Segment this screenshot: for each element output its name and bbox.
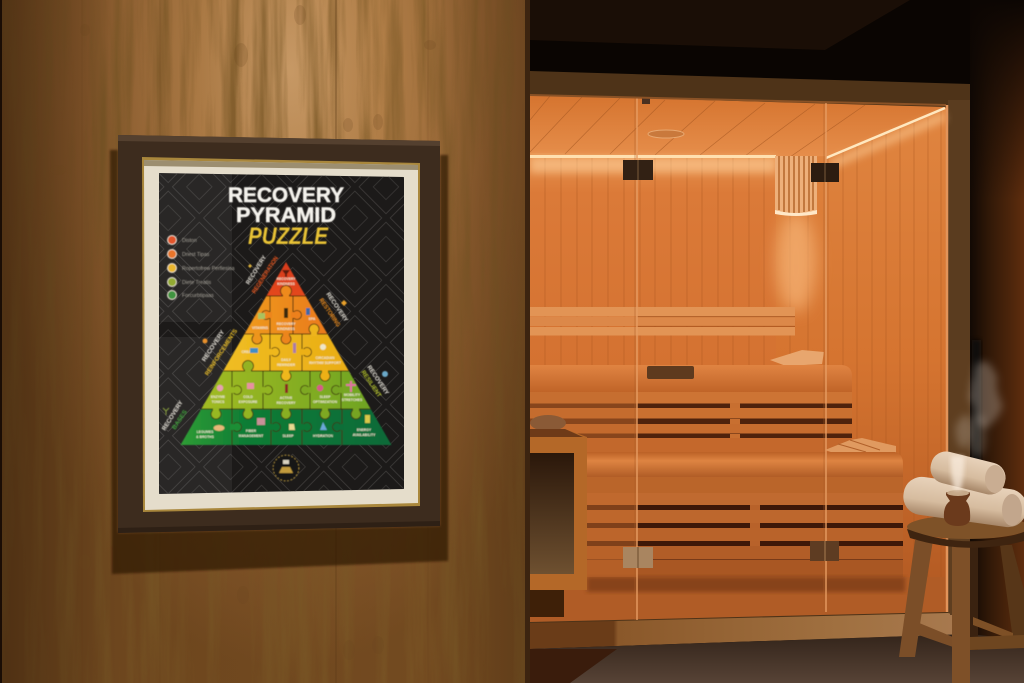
- chart: puzzle pyramid: [180, 262, 392, 445]
- logo badge: [273, 455, 299, 481]
- side wall: [776, 107, 948, 612]
- title: RECOVERY: [228, 184, 344, 207]
- piece labels: RECOVERY: [277, 322, 296, 326]
- piece labels: ENERGY: [357, 428, 372, 432]
- LED glow strip, back wall: [530, 157, 776, 173]
- piece labels: KINDNESS: [277, 327, 295, 331]
- legend: Driest Tipas: [182, 252, 210, 258]
- side label: bottom left: BASES: [171, 409, 189, 431]
- legend: [168, 236, 235, 300]
- wall lamp: [775, 156, 817, 312]
- upper bench: [530, 365, 852, 452]
- tier 5: green: [180, 409, 392, 445]
- legend: Diston: [182, 238, 197, 244]
- piece labels: CREATINE: [241, 350, 259, 354]
- lower towel roll: [901, 475, 1024, 529]
- piece labels: KINDNESS: [277, 282, 295, 286]
- LED glow strip, side wall: [830, 116, 945, 165]
- tier 4: lime: [201, 371, 371, 409]
- side label: middle left: RECOVERY: [201, 328, 227, 363]
- side label: middle right: RESILIENT: [359, 369, 383, 399]
- piece labels: MOBILITY: [344, 393, 361, 397]
- stool: [899, 515, 1024, 683]
- piece labels: VITAMINS: [252, 326, 269, 330]
- upper towel roll: [930, 452, 1006, 494]
- panel: wood wall: [0, 0, 530, 683]
- piece labels: CIRCADIAN: [315, 356, 335, 360]
- piece labels: FIBER: [246, 429, 257, 433]
- sauna floor: [530, 577, 945, 622]
- title: [228, 184, 344, 250]
- piece labels: EPA: [309, 317, 316, 321]
- piece labels: LEGUMES: [197, 430, 214, 434]
- ceiling: [530, 95, 946, 157]
- gold fillet: [142, 157, 420, 512]
- backrest: [530, 307, 795, 336]
- side label: middle left: REINFORCEMENTS: [204, 328, 239, 377]
- side label: top left: REGENERATION: [251, 255, 280, 295]
- back wall: [530, 153, 776, 365]
- top clip: [642, 98, 650, 104]
- hinge: lower right: [810, 541, 839, 561]
- mat board: [144, 160, 418, 510]
- side label: top right: [317, 291, 350, 329]
- steam column: [951, 456, 964, 490]
- tier 2: orange: [244, 296, 328, 334]
- piece labels: [196, 277, 376, 439]
- side label: middle right: RECOVERY: [365, 364, 391, 397]
- hinge: upper right: [811, 163, 839, 182]
- piece labels: TONICS: [212, 400, 225, 404]
- sauna heater: [530, 415, 587, 617]
- picture frame: [118, 135, 440, 533]
- piece labels: MANAGEMENT: [239, 434, 264, 438]
- tier 3: yellow: [223, 334, 349, 371]
- legend: Ropertofrew Perfiesisa: [182, 266, 235, 272]
- piece labels: AVAILABILITY: [353, 433, 376, 437]
- puzzle knobs: [211, 286, 361, 432]
- piece labels: RECOVERY: [277, 401, 296, 405]
- piece labels: RHYTHM SUPPORT: [309, 361, 342, 365]
- panel: framed poster: [118, 135, 440, 533]
- piece labels: HYDRATION: [313, 434, 334, 438]
- side label: top right: RESTORING: [317, 297, 342, 329]
- puzzle seams: [201, 296, 371, 445]
- panel: sauna interior: [530, 95, 948, 622]
- piece labels: ENZYME: [211, 395, 226, 399]
- fog over left of glass: [530, 392, 637, 577]
- glass doors: [623, 98, 839, 620]
- side label: top left: RECOVERY: [245, 254, 269, 286]
- pillow on upper bench: [647, 366, 694, 379]
- side label: top right: RECOVERY: [324, 291, 350, 324]
- frame inner edge and threshold: [530, 95, 970, 649]
- piece labels: & BROTHS: [196, 435, 215, 439]
- room floor: [530, 634, 1024, 683]
- piece labels: DAILY: [281, 358, 292, 362]
- piece labels: RECOVERY: [277, 277, 296, 281]
- ceiling vent: [648, 130, 684, 138]
- folded headrest upper: [770, 350, 824, 366]
- hinge: upper left: [623, 160, 653, 180]
- title: PUZZLE: [248, 223, 329, 250]
- piece labels: SLEEP: [319, 395, 331, 399]
- frame shadow on wall: [110, 150, 448, 574]
- towels: [901, 448, 1024, 529]
- dark stripe behind steam: [972, 340, 981, 465]
- hinge: lower left: [623, 547, 653, 568]
- legend: Forcurbtipaas: [182, 293, 214, 299]
- legend: Diete Treatis: [182, 280, 212, 286]
- piece labels: OPTIMIZATION: [313, 400, 338, 404]
- steam cloud: [956, 363, 1000, 457]
- piece labels: REMINDER: [277, 363, 296, 367]
- title: PYRAMID: [236, 204, 336, 227]
- lower bench: [587, 452, 903, 577]
- piece labels: COLD: [243, 395, 253, 399]
- tier 1: red: [266, 262, 306, 296]
- piece labels: ACTIVE: [280, 396, 293, 400]
- wall boards: [544, 111, 942, 542]
- diffuser vase: [944, 490, 970, 526]
- headrest lower: [826, 438, 896, 452]
- piece labels: SLEEP: [282, 434, 294, 438]
- panel: poster background: [159, 173, 404, 494]
- panel: sauna surround: [530, 0, 1024, 683]
- piece labels: EXPOSURE: [239, 400, 258, 404]
- piece labels: STRETCHES: [342, 398, 363, 402]
- piece icons: [214, 270, 370, 431]
- side label: bottom left: RECOVERY: [161, 399, 185, 432]
